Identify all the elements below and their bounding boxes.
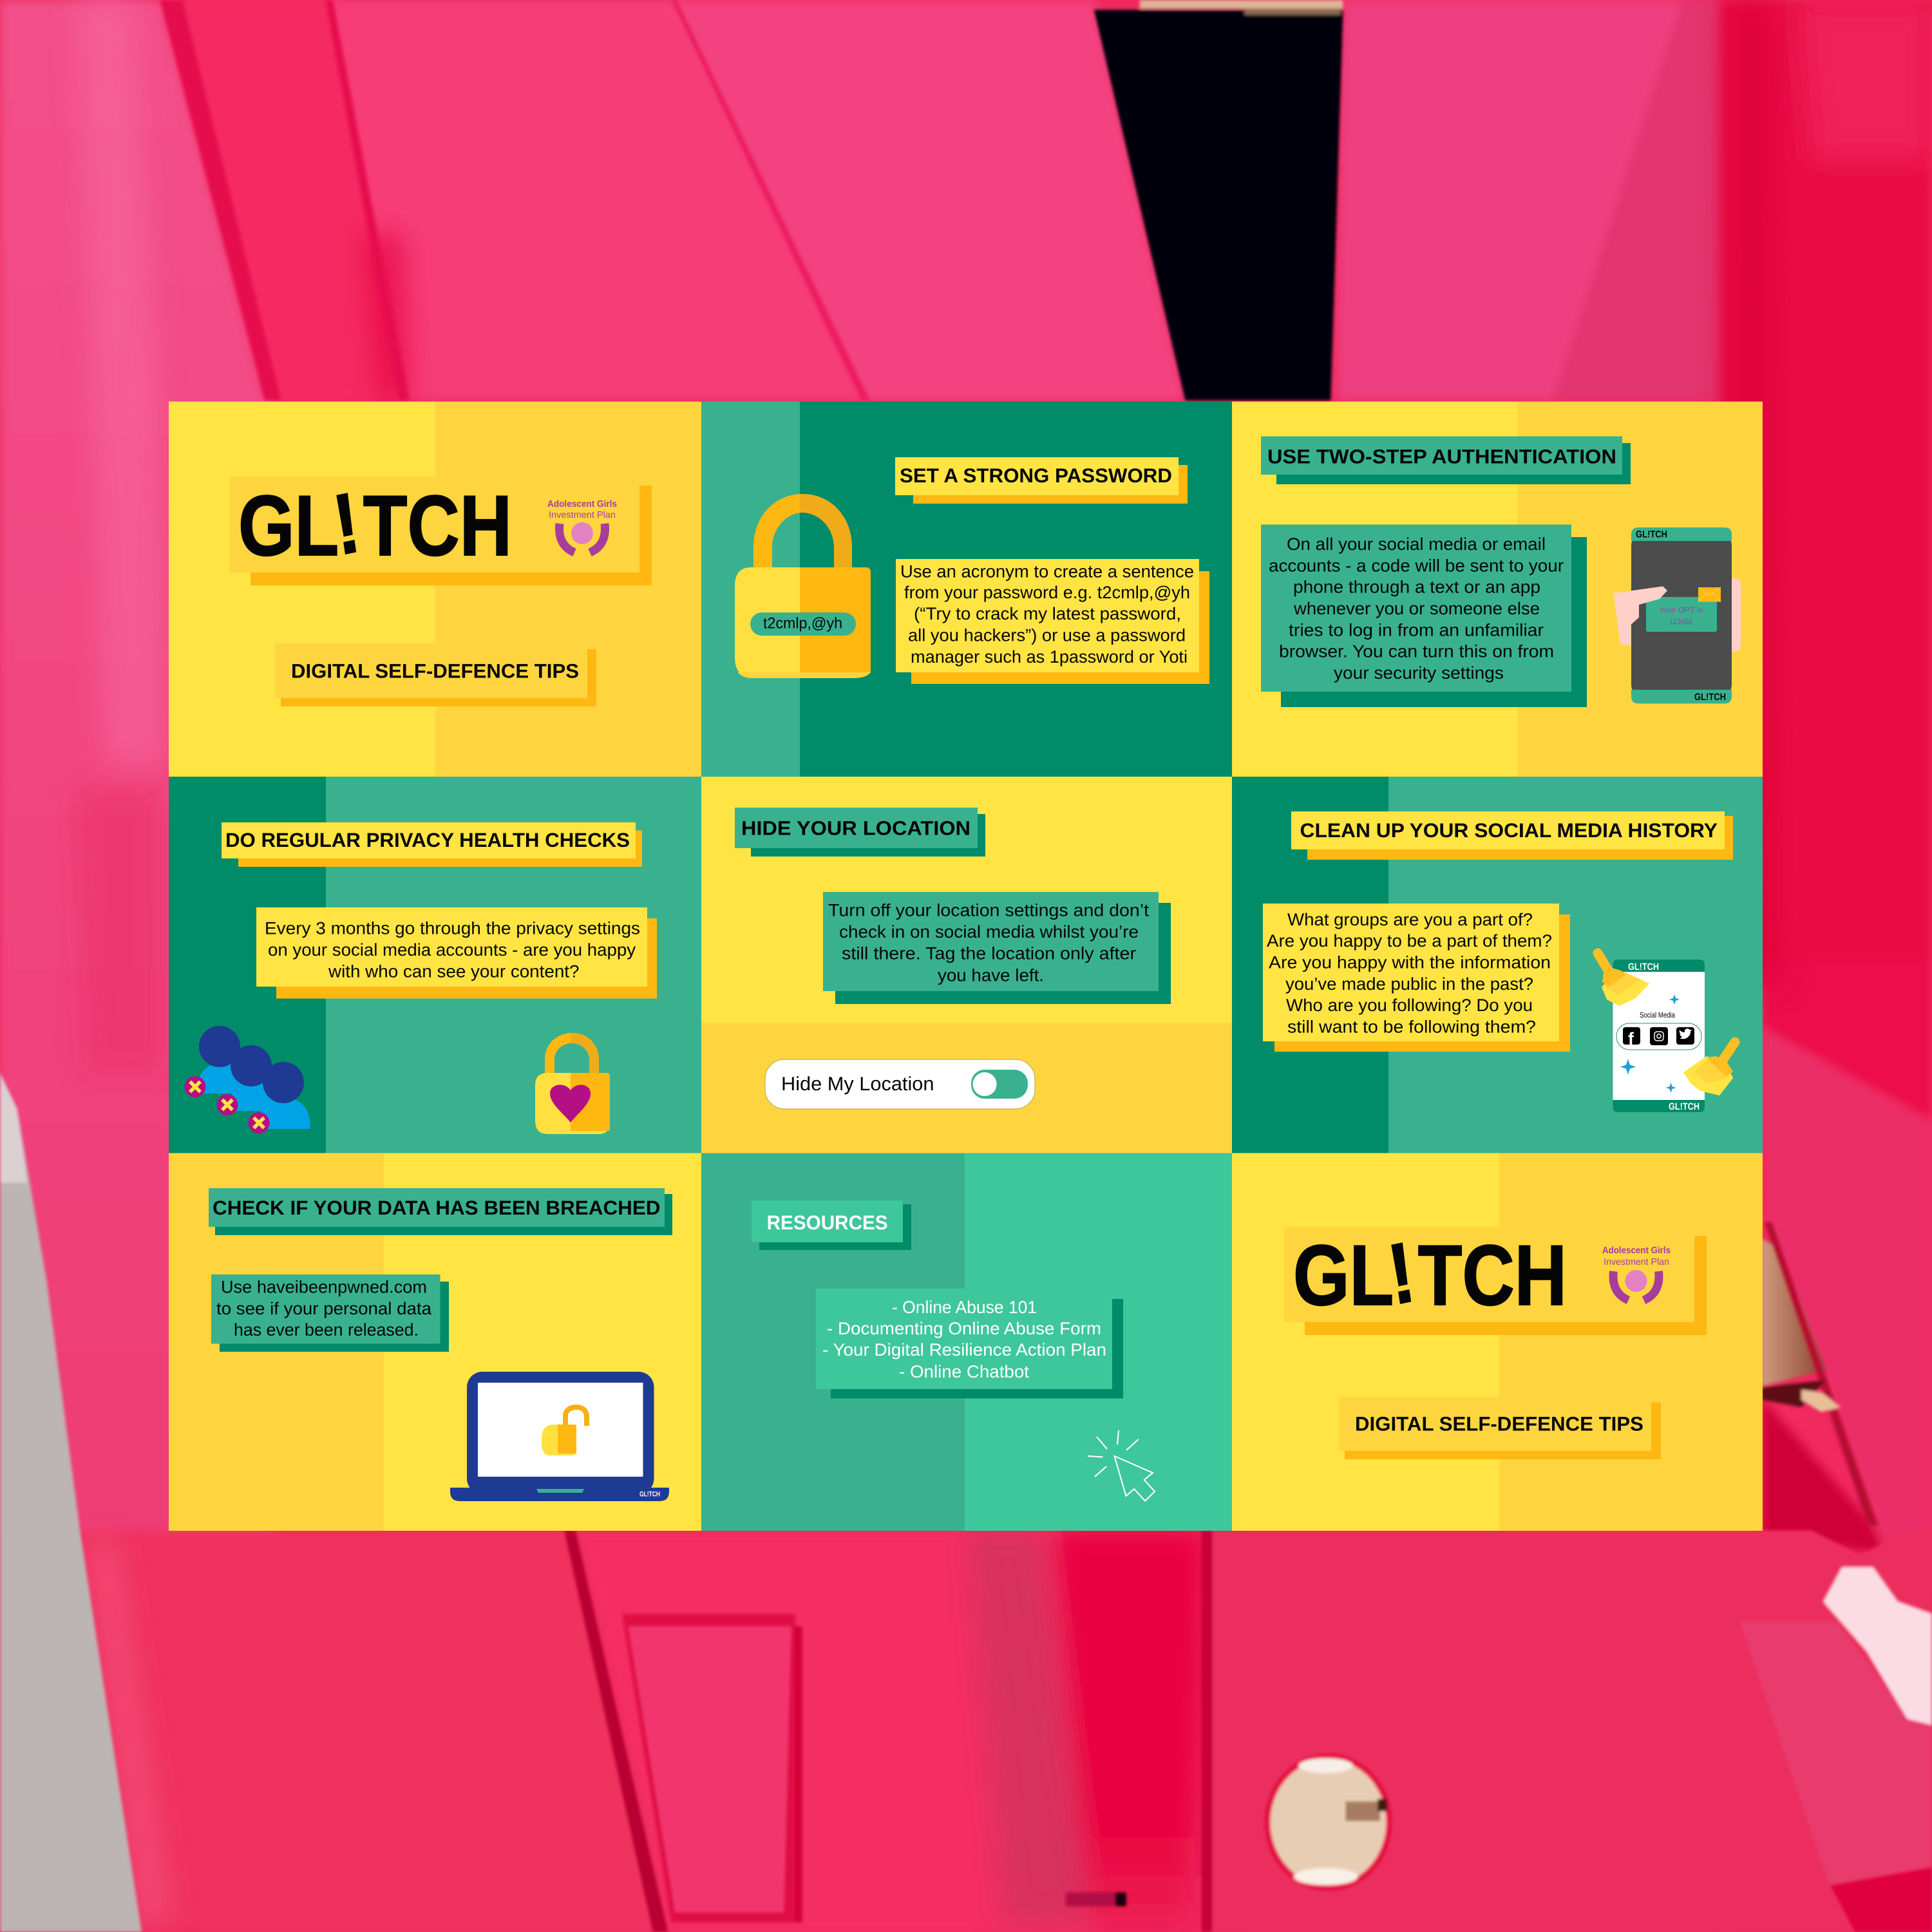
logo: Adolescent Girls Investment Plan: Investment Plan bbox=[1604, 1257, 1669, 1267]
text block: phone through a text or an app bbox=[1293, 578, 1540, 597]
panel: clean up social media bbox=[1232, 777, 1763, 1153]
text block bbox=[896, 559, 1209, 684]
text block: Use haveibeenpwned.com bbox=[221, 1278, 427, 1297]
text block: (“Try to crack my latest password, bbox=[914, 604, 1181, 623]
text block: On all your social media or email bbox=[1287, 535, 1546, 554]
icon: phone with one-time code: 123456 bbox=[1669, 617, 1692, 626]
text block: Turn off your location settings and don’t bbox=[828, 901, 1150, 920]
panel: Glitch logo top-left bbox=[169, 402, 701, 777]
panel: Glitch logo bottom-right bbox=[1232, 1153, 1763, 1531]
toggle: hide my location: Hide My Location bbox=[781, 1074, 934, 1095]
panel: resources bbox=[701, 1153, 1232, 1531]
text block: with who can see your content? bbox=[328, 962, 580, 981]
heading tag: USE TWO-STEP AUTHENTICATION bbox=[1267, 446, 1616, 468]
text block: has ever been released. bbox=[234, 1320, 419, 1340]
heading tag bbox=[1291, 811, 1733, 860]
heading tag bbox=[895, 457, 1188, 504]
heading tag bbox=[222, 822, 642, 867]
icon: laptop with open padlock bbox=[450, 1372, 669, 1501]
icon: blocked people bbox=[184, 1026, 310, 1133]
heading tag bbox=[209, 1188, 672, 1235]
panel: two-step authentication bbox=[1232, 402, 1763, 777]
text block: you have left. bbox=[938, 965, 1044, 985]
text block: resource list: - Online Abuse 101 bbox=[892, 1298, 1037, 1317]
text block: all you hackers”) or use a password bbox=[908, 626, 1186, 645]
text block bbox=[256, 907, 657, 998]
panel: set a strong password bbox=[701, 402, 1232, 777]
text block: still want to be following them? bbox=[1287, 1017, 1536, 1036]
text block: resource list bbox=[816, 1289, 1123, 1399]
text block: Use an acronym to create a sentence bbox=[900, 562, 1194, 581]
icon: padlock with heart bbox=[535, 1033, 610, 1134]
text block: resource list: - Online Chatbot bbox=[899, 1362, 1030, 1381]
text block: your security settings bbox=[1334, 663, 1504, 683]
heading tag: RESOURCES bbox=[767, 1211, 888, 1234]
icon: social media phone with brooms: GL!TCH bbox=[1628, 961, 1659, 972]
text block: whenever you or someone else bbox=[1293, 599, 1540, 618]
heading tag bbox=[752, 1200, 911, 1250]
icon: social media phone with brooms: Social Media bbox=[1640, 1010, 1675, 1019]
panel: hide your location bbox=[701, 777, 1232, 1153]
toggle: hide my location bbox=[765, 1059, 1035, 1109]
icon: padlock: t2cmlp,@yh bbox=[763, 614, 842, 632]
icon: social media phone with brooms: f bbox=[1628, 1029, 1634, 1048]
text block: check in on social media whilst you’re bbox=[839, 922, 1139, 942]
heading tag: HIDE YOUR LOCATION bbox=[741, 817, 971, 840]
text block bbox=[1261, 524, 1587, 707]
text block: browser. You can turn this on from bbox=[1279, 642, 1554, 661]
panel: check data breach bbox=[169, 1153, 701, 1531]
subtitle tag bbox=[275, 643, 596, 706]
text block: from your password e.g. t2cmlp,@yh bbox=[904, 583, 1190, 602]
text block: What groups are you a part of? bbox=[1287, 910, 1533, 929]
text block: Who are you following? Do you bbox=[1286, 996, 1533, 1015]
text block bbox=[211, 1274, 449, 1352]
text block: accounts - a code will be sent to your bbox=[1269, 556, 1564, 575]
text block: resource list: - Documenting Online Abuse Form bbox=[827, 1319, 1101, 1338]
logo: Adolescent Girls Investment Plan: Adolescent Girls bbox=[1602, 1245, 1671, 1256]
text block: still there. Tag the location only after bbox=[842, 944, 1136, 963]
text block: manager such as 1password or Yoti bbox=[911, 647, 1188, 667]
subtitle tag: DIGITAL SELF-DEFENCE TIPS bbox=[1355, 1413, 1643, 1435]
logo: Adolescent Girls Investment Plan: Adolescent Girls bbox=[547, 499, 617, 509]
logo: Adolescent Girls Investment Plan: Investment Plan bbox=[549, 510, 616, 520]
icon: mouse cursor bbox=[1088, 1430, 1155, 1501]
text block: Are you happy with the information bbox=[1269, 953, 1551, 972]
text block: Every 3 months go through the privacy settings bbox=[265, 919, 640, 938]
icon: phone with one-time code: Your OPT is bbox=[1660, 605, 1703, 614]
text block: resource list: - Your Digital Resilience Action Plan bbox=[822, 1340, 1106, 1359]
logo: GLITCH wordmark: GL!TCH bbox=[238, 475, 512, 574]
text block: tries to log in from an unfamiliar bbox=[1289, 620, 1544, 639]
text block: to see if your personal data bbox=[216, 1299, 432, 1318]
heading tag: CHECK IF YOUR DATA HAS BEEN BREACHED bbox=[213, 1197, 661, 1219]
text block bbox=[1263, 904, 1570, 1052]
panel: privacy health checks bbox=[169, 777, 701, 1153]
logo: GLITCH wordmark: GL!TCH bbox=[1293, 1225, 1567, 1323]
heading tag: SET A STRONG PASSWORD bbox=[900, 464, 1172, 487]
text block: on your social media accounts - are you happy bbox=[268, 940, 636, 960]
icon: phone with one-time code: GL!TCH bbox=[1636, 529, 1667, 540]
logo: Adolescent Girls Investment Plan bbox=[547, 499, 617, 553]
heading tag: DO REGULAR PRIVACY HEALTH CHECKS bbox=[225, 829, 630, 851]
icon: padlock bbox=[735, 494, 871, 678]
text block bbox=[823, 892, 1171, 1004]
icon: phone with one-time code bbox=[1614, 527, 1741, 703]
heading tag: CLEAN UP YOUR SOCIAL MEDIA HISTORY bbox=[1300, 819, 1718, 842]
icon: phone with one-time code: GL!TCH bbox=[1694, 692, 1726, 703]
subtitle tag bbox=[1340, 1397, 1661, 1459]
icon: laptop with open padlock: GL!TCH bbox=[639, 1490, 660, 1498]
text block: you’ve made public in the past? bbox=[1285, 974, 1533, 994]
subtitle tag: DIGITAL SELF-DEFENCE TIPS bbox=[291, 660, 579, 683]
heading tag bbox=[735, 808, 985, 857]
text block: Are you happy to be a part of them? bbox=[1267, 931, 1552, 951]
icon: social media phone with brooms: GL!TCH bbox=[1669, 1101, 1700, 1112]
logo: Adolescent Girls Investment Plan bbox=[1602, 1245, 1671, 1300]
icon: social media phone with brooms bbox=[1598, 953, 1735, 1112]
heading tag bbox=[1261, 437, 1631, 484]
